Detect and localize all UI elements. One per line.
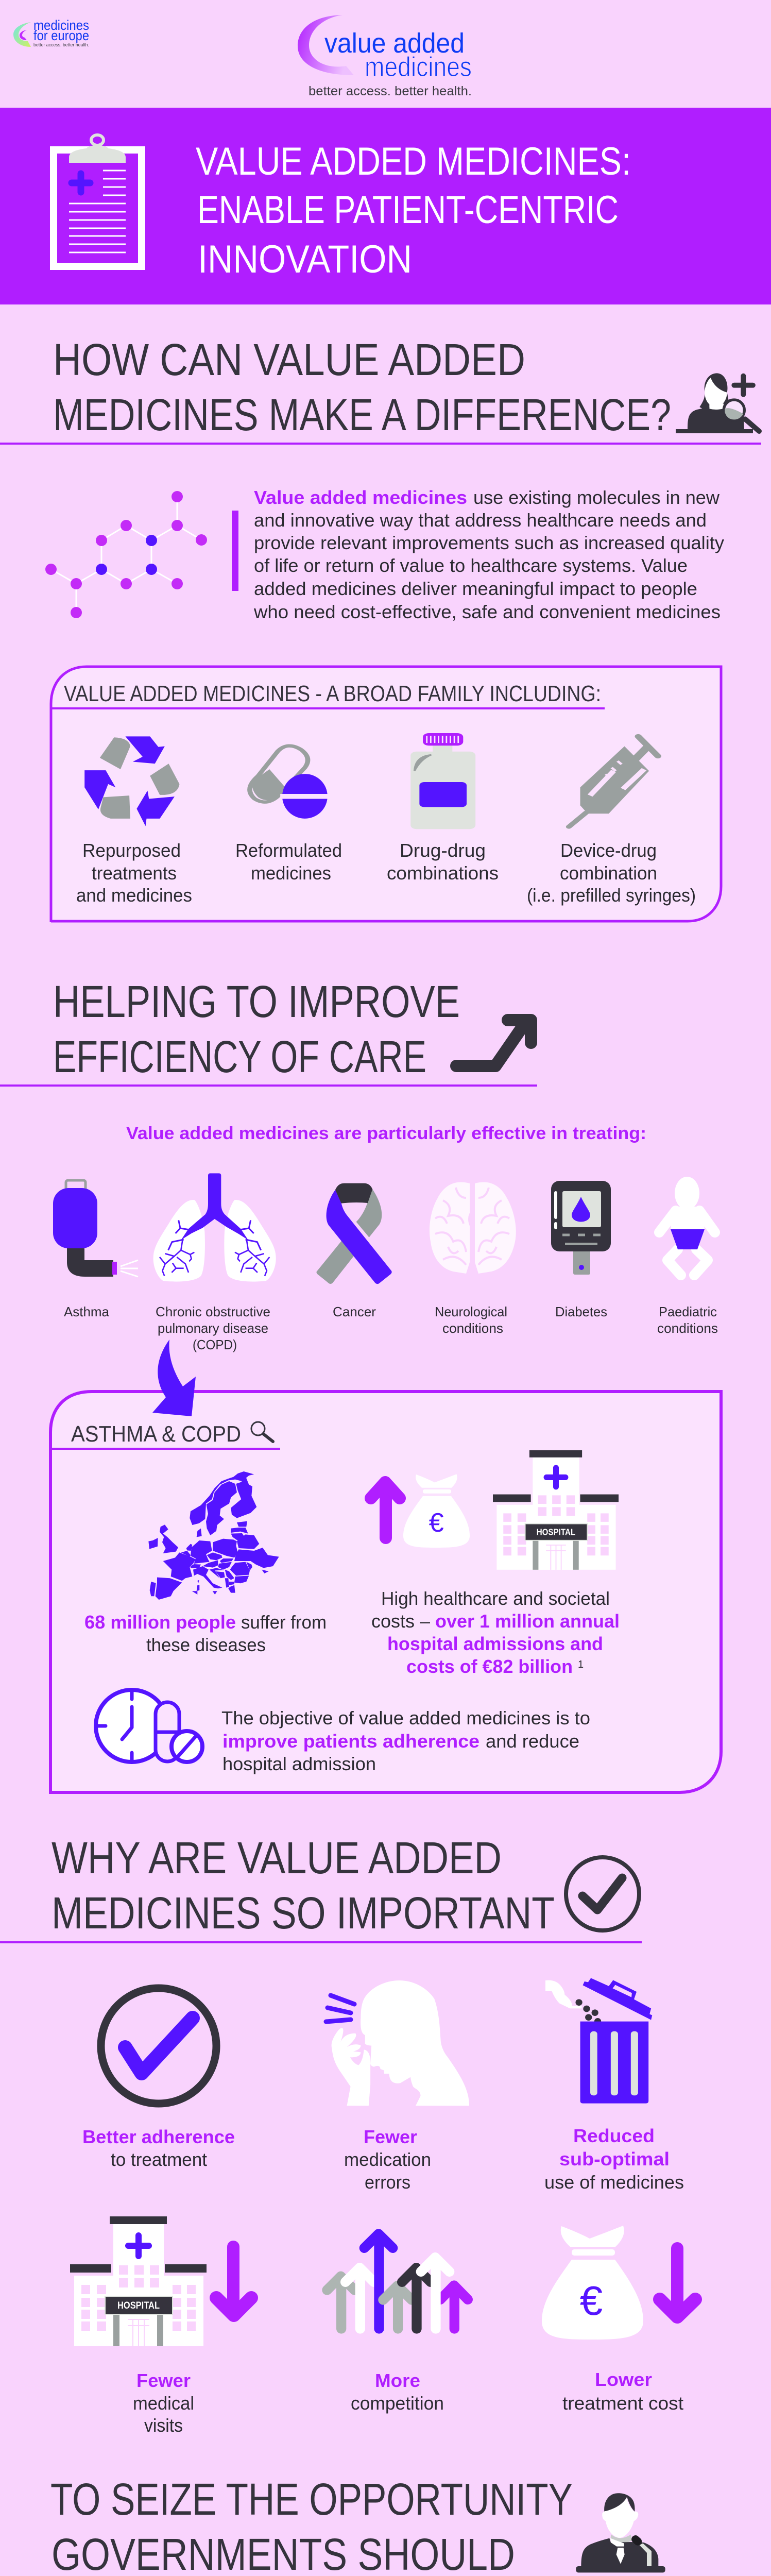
title text bbox=[196, 140, 631, 281]
panel: asthma and copd bbox=[50, 1392, 721, 1792]
condition labels: Cancer bbox=[333, 1304, 376, 1319]
icon: money bag bbox=[403, 1474, 470, 1548]
benefit: more competition: competition bbox=[351, 2393, 444, 2414]
icon: rising costs arrow bbox=[371, 1482, 400, 1538]
intro text block: Value added medicines bbox=[254, 487, 467, 508]
label: repurposed: treatments bbox=[92, 862, 177, 884]
condition labels: Asthma bbox=[64, 1304, 110, 1319]
benefit: more competition bbox=[327, 2234, 468, 2414]
icon: hospital: HOSPITAL bbox=[537, 1527, 576, 1537]
section heading: why are value added medicines so important bbox=[0, 1833, 642, 1943]
label: device-drug: combination bbox=[560, 862, 657, 884]
icon: money bag: € bbox=[429, 1508, 444, 1538]
text: 68 million people: suffer from bbox=[241, 1612, 327, 1633]
section heading: helping to improve efficiency of care bbox=[0, 977, 537, 1087]
benefit: reduced sub-optimal use: sub-optimal bbox=[559, 2148, 670, 2170]
label: drug-drug: combinations bbox=[387, 862, 499, 884]
section heading: how can value added medicines make a difference bbox=[0, 335, 761, 445]
text: objective bbox=[221, 1707, 590, 1774]
label: reformulated bbox=[235, 840, 342, 884]
label: device-drug bbox=[527, 840, 696, 906]
section heading: why are value added medicines so important: WHY ARE VALUE ADDED bbox=[52, 1833, 502, 1883]
condition labels: conditions bbox=[657, 1320, 718, 1336]
condition labels bbox=[64, 1304, 718, 1352]
benefit: better adherence: Better adherence bbox=[82, 2126, 235, 2147]
icon: rising arrow bbox=[456, 1020, 531, 1066]
benefit: fewer medication errors: Fewer bbox=[364, 2126, 417, 2147]
icon: recycle bbox=[84, 736, 179, 826]
icon: baby bbox=[659, 1177, 715, 1275]
section heading: to seize the opportunity: TO SEIZE THE OPPORTUNITY bbox=[50, 2475, 573, 2524]
logo: value added medicines: better access. better health. bbox=[309, 84, 472, 98]
logo: value added medicines bbox=[298, 15, 472, 98]
condition labels: (COPD) bbox=[193, 1337, 237, 1352]
icon: money bag bbox=[542, 2226, 643, 2340]
title text: ENABLE PATIENT-CENTRIC bbox=[197, 188, 619, 232]
text: high costs: hospital admissions and bbox=[387, 1633, 603, 1654]
heading: asthma and copd: ASTHMA & COPD bbox=[71, 1421, 241, 1447]
condition labels: conditions bbox=[442, 1320, 503, 1336]
icon: syringe bbox=[569, 736, 658, 827]
subheading: effective in treating: Value added medicines are particularly effective in treating: bbox=[126, 1124, 646, 1143]
condition labels: Chronic obstructive bbox=[156, 1304, 270, 1319]
text: 68 million people bbox=[84, 1612, 327, 1655]
benefit: fewer medical visits: visits bbox=[144, 2415, 183, 2436]
icon: hospital: HOSPITAL bbox=[117, 2300, 160, 2311]
benefit: reduced sub-optimal use: use of medicines bbox=[544, 2172, 684, 2193]
logo: value added medicines: medicines bbox=[365, 52, 472, 82]
arrow: copd to panel bbox=[152, 1340, 196, 1416]
intro text block: and innovative way that address healthcare needs and bbox=[254, 510, 707, 531]
benefit: lower treatment cost bbox=[542, 2226, 695, 2414]
label: repurposed: and medicines bbox=[76, 885, 192, 906]
benefit: reduced sub-optimal use: Reduced bbox=[573, 2125, 655, 2146]
condition labels: Paediatric bbox=[659, 1304, 717, 1319]
title text: VALUE ADDED MEDICINES: bbox=[196, 140, 631, 183]
condition labels: pulmonary disease bbox=[158, 1320, 268, 1336]
logo: medicines for europe: better access. better health. bbox=[33, 42, 89, 47]
intro text block: added medicines deliver meaningful impact to people bbox=[254, 578, 697, 599]
benefit: more competition: More bbox=[375, 2370, 420, 2391]
icon: clipboard bbox=[54, 135, 142, 266]
benefit: lower treatment cost: treatment cost bbox=[562, 2393, 683, 2414]
map: europe bbox=[148, 1471, 279, 1600]
logo: medicines for europe bbox=[13, 18, 89, 47]
section heading: how can value added medicines make a difference: HOW CAN VALUE ADDED bbox=[53, 335, 525, 385]
text: objective: improve patients adherence bbox=[222, 1731, 479, 1752]
icon: hospital bbox=[493, 1450, 619, 1570]
intro text block bbox=[232, 487, 724, 622]
benefit: lower treatment cost: Lower bbox=[595, 2369, 652, 2390]
icon: lungs bbox=[153, 1173, 276, 1282]
icon: money bag: € bbox=[580, 2278, 603, 2324]
icon: down arrow bbox=[216, 2247, 251, 2315]
benefit: fewer medical visits: Fewer bbox=[136, 2370, 191, 2391]
benefit: reduced sub-optimal use bbox=[544, 1978, 684, 2193]
label: drug-drug: Drug-drug bbox=[400, 840, 486, 861]
icon: hospital bbox=[70, 2216, 207, 2346]
icon: clock and pills bbox=[96, 1690, 202, 1762]
text: high costs bbox=[371, 1588, 620, 1677]
label: device-drug: Device-drug bbox=[560, 840, 657, 861]
icon: capsule and tablet bbox=[250, 746, 330, 819]
benefit: fewer medication errors: medication bbox=[344, 2149, 431, 2170]
text: high costs: over 1 million annual bbox=[435, 1611, 620, 1632]
label: repurposed bbox=[76, 840, 192, 906]
label: reformulated: medicines bbox=[251, 862, 331, 884]
logo: value added medicines: value added bbox=[324, 28, 465, 59]
intro text block: of life or return of value to healthcare systems. Value bbox=[254, 555, 688, 576]
intro text block: who need cost-effective, safe and convenient medicines bbox=[253, 601, 721, 622]
section heading: why are value added medicines so important: MEDICINES SO IMPORTANT bbox=[52, 1888, 555, 1938]
text: 68 million people: these diseases bbox=[146, 1634, 266, 1655]
icon: down arrow bbox=[660, 2248, 695, 2317]
benefit: better adherence: to treatment bbox=[111, 2149, 207, 2170]
label: device-drug: (i.e. prefilled syringes) bbox=[527, 885, 696, 906]
icon: brain bbox=[430, 1182, 516, 1274]
icon: government speaker bbox=[576, 2493, 665, 2572]
text: objective: and reduce bbox=[486, 1731, 579, 1752]
text: objective: hospital admission bbox=[222, 1753, 376, 1774]
text: high costs: costs – bbox=[371, 1611, 430, 1632]
section heading: to seize the opportunity bbox=[0, 2475, 665, 2576]
benefit: fewer medication errors bbox=[326, 1980, 469, 2193]
label: drug-drug bbox=[387, 840, 499, 884]
section heading: helping to improve efficiency of care: EFFICIENCY OF CARE bbox=[53, 1032, 426, 1082]
section heading: helping to improve efficiency of care: HELPING TO IMPROVE bbox=[53, 977, 460, 1027]
panel: broad family: VALUE ADDED MEDICINES - A BROAD FAMILY INCLUDING: bbox=[64, 681, 601, 706]
icon: molecule bbox=[45, 491, 207, 618]
label: reformulated: Reformulated bbox=[235, 840, 342, 861]
logo: medicines for europe: for europe bbox=[33, 28, 89, 43]
benefit: fewer medical visits: medical bbox=[133, 2393, 194, 2414]
icon: heading check bbox=[566, 1857, 639, 1930]
icon: inhaler bbox=[53, 1180, 138, 1277]
text: high costs: 1 bbox=[578, 1659, 584, 1670]
icon: ribbon bbox=[316, 1183, 392, 1284]
title text: INNOVATION bbox=[198, 238, 412, 281]
text: high costs: costs of €82 billion bbox=[406, 1656, 573, 1677]
condition labels: Diabetes bbox=[555, 1304, 607, 1319]
icon: woman with magnifier and plus bbox=[676, 373, 759, 433]
text: objective: The objective of value added medicines is to bbox=[221, 1707, 590, 1728]
text: high costs: High healthcare and societal bbox=[381, 1588, 610, 1609]
text: 68 million people: 68 million people bbox=[84, 1612, 236, 1633]
label: repurposed: Repurposed bbox=[82, 840, 181, 861]
benefit: fewer medical visits bbox=[70, 2216, 251, 2436]
logo: medicines for europe: medicines bbox=[33, 18, 89, 33]
intro text block: use existing molecules in new bbox=[473, 487, 720, 508]
icon: bottle bbox=[410, 733, 475, 829]
title banner bbox=[0, 108, 771, 304]
condition labels: Neurological bbox=[435, 1304, 507, 1319]
intro text block: provide relevant improvements such as increased quality bbox=[254, 532, 724, 553]
panel: broad family bbox=[51, 667, 721, 922]
icon: glucose meter bbox=[551, 1181, 611, 1275]
benefit: fewer medication errors: errors bbox=[365, 2172, 410, 2193]
benefit: better adherence bbox=[82, 1988, 235, 2170]
icon: rising arrows bbox=[327, 2234, 468, 2329]
